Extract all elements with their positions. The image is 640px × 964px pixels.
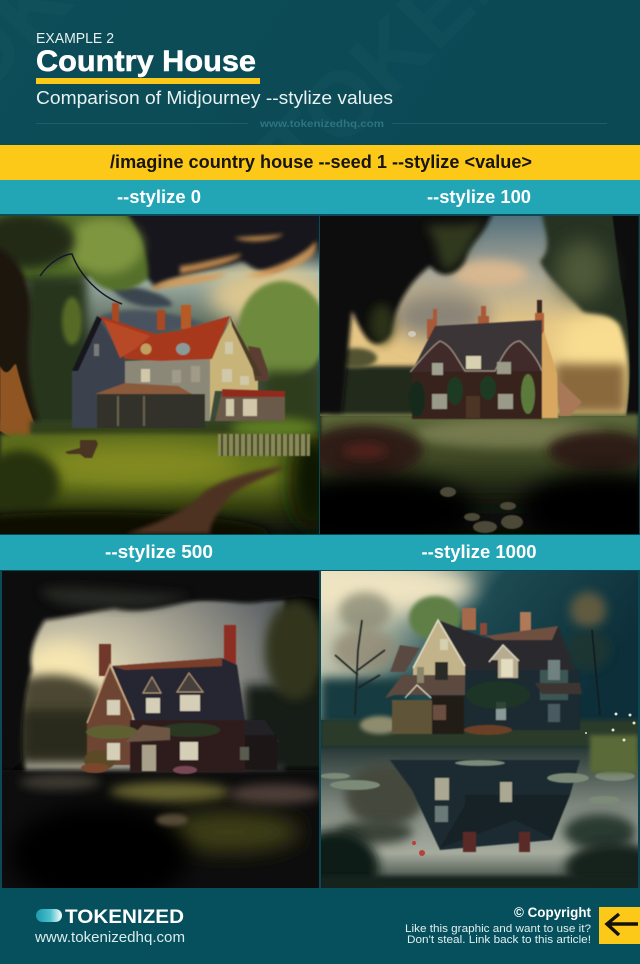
right tree: [570, 592, 606, 628]
gable: [87, 665, 132, 765]
copyright notice: [405, 905, 591, 946]
column headers row 1: --stylize 0: [117, 187, 201, 207]
red flowers: [412, 841, 425, 856]
front flowers: [360, 716, 400, 734]
left tree: [315, 211, 493, 416]
reeds right: [590, 735, 638, 773]
roof: [412, 320, 542, 371]
lit side wall: [535, 331, 558, 418]
roof: [438, 620, 575, 670]
icon: yellow arrow box: [599, 907, 640, 944]
upper windows: [432, 363, 443, 375]
column headers row 1: --stylize 100: [427, 187, 531, 207]
red roof: [100, 316, 230, 361]
lower windows: [432, 394, 447, 409]
reflection: [390, 760, 580, 852]
column headers row 2: --stylize 500: [105, 542, 213, 562]
dirt path: [125, 466, 285, 534]
dormer: [490, 645, 518, 678]
image: stylize 100: [320, 216, 639, 534]
flowers: [173, 766, 197, 774]
header: [36, 30, 607, 130]
flower bushes: [307, 425, 423, 477]
copyright notice: © Copyright: [514, 905, 591, 920]
title underline: [36, 78, 260, 84]
stepping stones: [440, 487, 523, 533]
door: [466, 396, 480, 418]
canopy: [0, 570, 320, 780]
distant trees: [20, 675, 100, 760]
ivy and flowers: [466, 681, 530, 709]
main wall: [130, 720, 245, 772]
porch: [392, 700, 432, 734]
distant treeline: [330, 366, 420, 416]
windows: [107, 695, 249, 760]
house: [72, 303, 285, 428]
fence: [218, 434, 310, 456]
chimneys: [99, 644, 111, 676]
dark walls: [430, 670, 580, 730]
hedge and grass: [30, 421, 319, 439]
side and front walls: [72, 316, 125, 428]
gable wall: [413, 620, 465, 685]
prompt banner: /imagine country house --seed 1 --stylize <value>: [110, 152, 532, 172]
water: [320, 748, 640, 888]
orange cloud streaks: [150, 234, 316, 290]
column headers row 1: [0, 180, 640, 214]
porch and door: [125, 725, 170, 742]
logo mark: [36, 909, 62, 922]
right trees: [238, 281, 326, 381]
ivy: [86, 725, 138, 739]
logo: [34, 907, 185, 946]
bird: [408, 331, 416, 337]
image: stylize 500: [2, 571, 319, 888]
ground: [320, 414, 639, 534]
lower left roof: [385, 675, 465, 698]
ground: [0, 770, 320, 890]
dormers: [140, 344, 152, 354]
logo wordmark: TOKENIZED: [65, 907, 184, 928]
chimneys: [427, 319, 437, 339]
left tree canopy: [0, 211, 148, 291]
right tree: [540, 211, 639, 466]
far bank and grass: [320, 720, 640, 748]
subtitle: Comparison of Midjourney --stylize values: [36, 88, 393, 108]
column headers row 2: --stylize 1000: [422, 542, 536, 562]
copyright notice: Don't steal. Link back to this article!: [407, 934, 591, 946]
sky: [25, 600, 285, 780]
chimneys: [112, 303, 119, 323]
windows: [417, 639, 560, 722]
bench: [65, 440, 98, 458]
chimneys: [462, 608, 476, 630]
prompt banner: [0, 145, 640, 180]
background watermark: [0, 0, 640, 204]
footer website: www.tokenizedhq.com: [34, 930, 185, 946]
left tree: [333, 592, 397, 715]
website line: www.tokenizedhq.com: [259, 118, 384, 130]
house: [409, 300, 582, 419]
title: Country House: [36, 45, 256, 78]
dark roof: [112, 658, 245, 720]
walls: [412, 371, 542, 419]
dark cloud: [125, 216, 319, 288]
lean-to: [558, 379, 582, 416]
porch: [95, 383, 192, 394]
windows: [94, 342, 257, 416]
eyebrow: example number: EXAMPLE 2: [36, 30, 114, 47]
column headers row 2: [0, 535, 640, 570]
house: [385, 608, 582, 735]
copyright notice: Like this graphic and want to use it?: [405, 923, 591, 935]
right extension: [215, 391, 285, 421]
ivy: [521, 374, 535, 414]
image: stylize 0: [0, 216, 319, 534]
back green tree: [409, 596, 461, 640]
dormers: [143, 677, 161, 693]
lily pads: [320, 760, 635, 804]
footer: [0, 888, 640, 964]
image: stylize 1000: [321, 571, 638, 888]
tree trunk: [0, 246, 52, 461]
house: [81, 625, 280, 774]
